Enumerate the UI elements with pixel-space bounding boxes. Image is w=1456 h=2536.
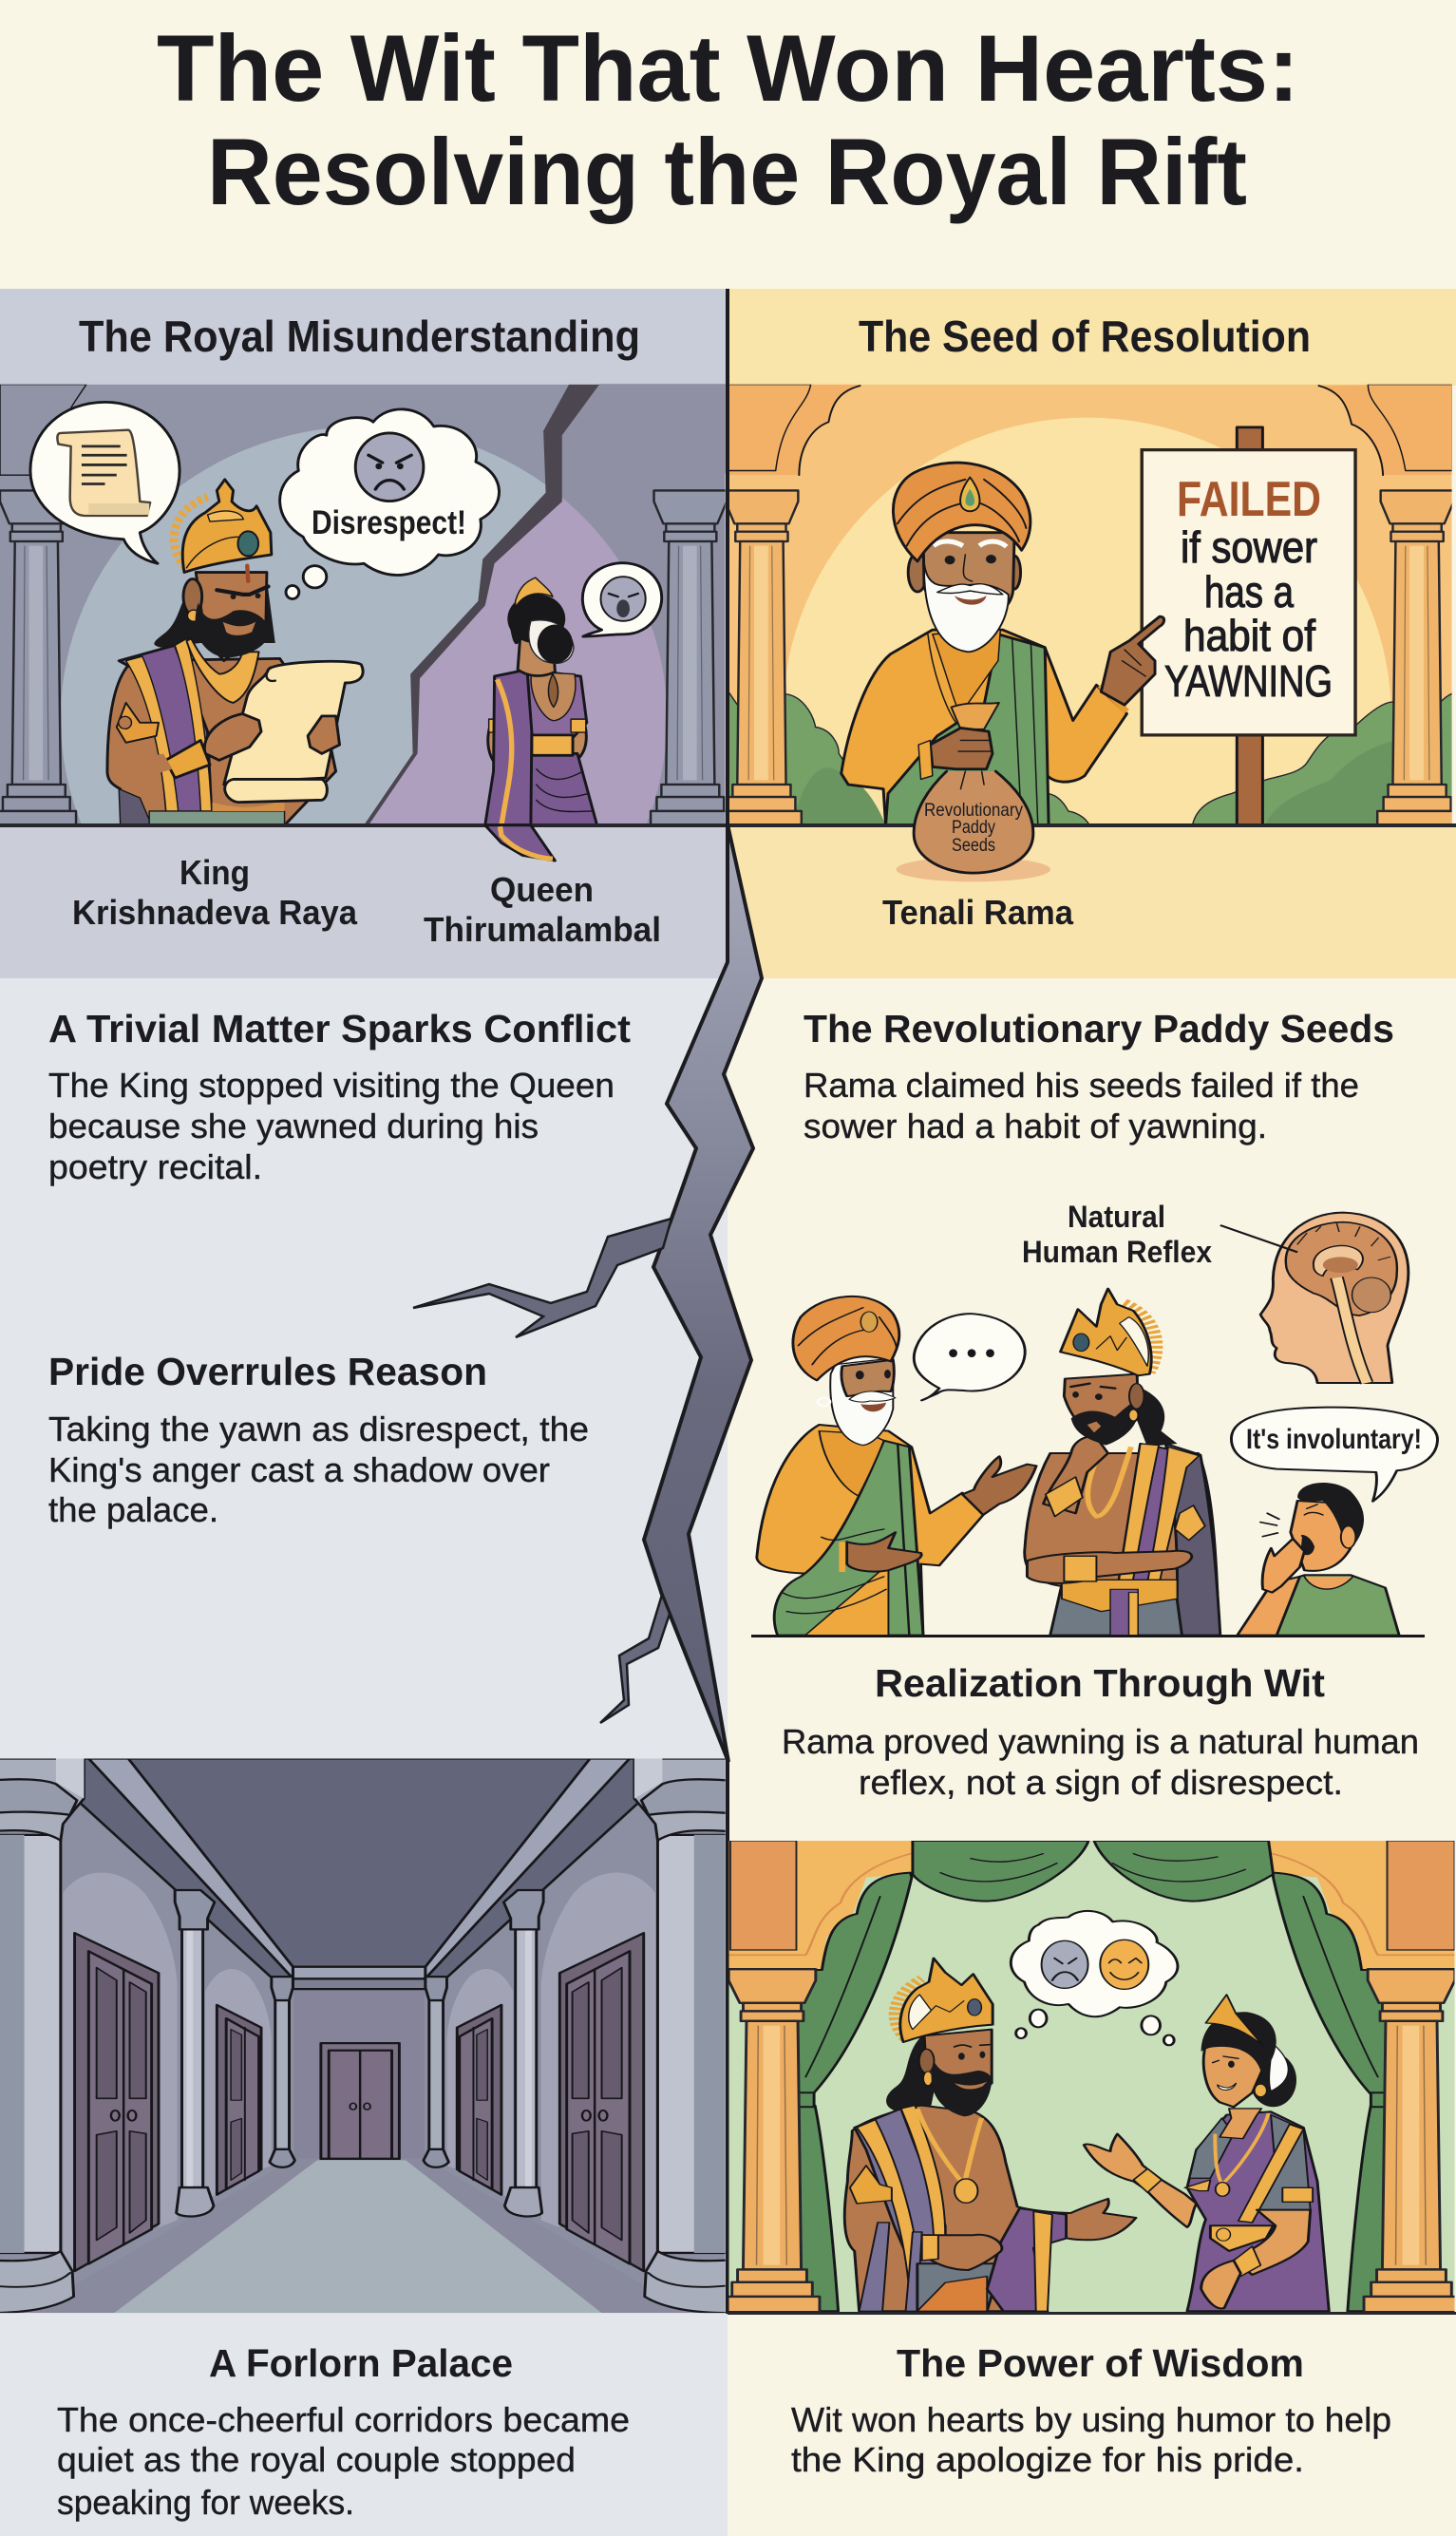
speech bubble: dots xyxy=(914,1314,1025,1400)
illustration: Tenali, king and yawning man xyxy=(751,1200,1438,1637)
crown xyxy=(174,497,208,568)
heading: A Trivial Matter Sparks Conflict: A Trivial Matter Sparks Conflict xyxy=(48,1007,631,1050)
bushes xyxy=(728,691,1456,825)
ground line xyxy=(751,1635,1425,1637)
seed sack: Paddy xyxy=(952,818,995,838)
heading: Realization Through Wit: Realization Through Wit xyxy=(875,1661,1325,1705)
illustration: reconciliation under the arch xyxy=(725,1841,1456,2312)
tenali xyxy=(841,630,1126,825)
panel: left column background xyxy=(0,289,728,2536)
middle column xyxy=(182,1927,203,2187)
text block: seeds: sower had a habit of yawning. xyxy=(804,1107,1267,1145)
panel: right column background xyxy=(728,289,1456,2536)
text block: realization: Rama proved yawning is a natural human xyxy=(782,1722,1419,1761)
text block: realization xyxy=(782,1722,1419,1802)
text block: pride: King's anger cast a shadow over xyxy=(48,1450,550,1489)
text block: conflict: because she yawned during his xyxy=(48,1107,539,1145)
character: Tenali Rama xyxy=(757,1296,1036,1636)
heading: Pride Overrules Reason: Pride Overrules Reason xyxy=(48,1350,487,1393)
text: Disrespect!: Disrespect! xyxy=(312,504,466,541)
label: Natural Human Reflex xyxy=(1022,1200,1212,1269)
speech bubble: yawning queen xyxy=(582,563,662,636)
lintel xyxy=(293,1967,425,1978)
columns xyxy=(725,1969,820,2312)
thought bubble xyxy=(1011,1911,1178,2045)
seed sack: Revolutionary xyxy=(924,801,1023,821)
sign text: FAILED xyxy=(1177,472,1321,527)
illustration frame line xyxy=(0,823,1456,827)
hands xyxy=(204,714,261,760)
text block: seeds xyxy=(804,1066,1359,1145)
back wall xyxy=(293,1988,425,2159)
heading: A Forlorn Palace: A Forlorn Palace xyxy=(209,2341,513,2385)
heading: The Seed of Resolution: The Seed of Resolution xyxy=(859,312,1311,361)
title xyxy=(157,15,1299,224)
sign text: YAWNING xyxy=(1164,656,1333,706)
title: Resolving the Royal Rift xyxy=(207,119,1247,224)
carpet xyxy=(114,2160,602,2313)
sign text: habit of xyxy=(1183,611,1315,660)
illustration: forlorn palace corridor xyxy=(0,1758,728,2313)
text block: wisdom xyxy=(791,2400,1391,2479)
crack branch lower xyxy=(600,1595,670,1723)
text block: forlorn palace: quiet as the royal couple stopped xyxy=(57,2440,576,2479)
text block: pride xyxy=(48,1410,589,1529)
turban xyxy=(893,463,1031,561)
caption: King Krishnadeva Raya: King xyxy=(180,853,250,892)
crack dividing the panels xyxy=(413,289,762,1762)
center door xyxy=(321,2043,399,2159)
ceiling xyxy=(128,1758,590,1967)
character: thoughtful king xyxy=(1025,1289,1220,1636)
left wall and doors xyxy=(0,1758,294,2313)
caption: Queen Thirumalambal: Thirumalambal xyxy=(424,910,661,949)
heading: The Power of Wisdom: The Power of Wisdom xyxy=(897,2341,1304,2385)
text block: forlorn palace: The once-cheerful corridors became xyxy=(57,2400,630,2439)
character: king xyxy=(844,1959,1136,2311)
speech bubble: scroll xyxy=(30,402,180,563)
queen xyxy=(484,577,598,823)
text block: realization: reflex, not a sign of disrespect. xyxy=(859,1763,1343,1802)
crack branch upper xyxy=(413,1219,671,1337)
text block: seeds: Rama claimed his seeds failed if the xyxy=(804,1066,1359,1105)
text block: pride: Taking the yawn as disrespect, the xyxy=(48,1410,589,1448)
label: Natural Human Reflex: Natural xyxy=(1068,1200,1165,1234)
caption: King Krishnadeva Raya: Krishnadeva Raya xyxy=(72,893,358,932)
queen sari overlap xyxy=(485,825,555,861)
crack main body xyxy=(644,824,762,1762)
character: queen xyxy=(1084,1995,1329,2311)
illustration: Tenali Rama with sign xyxy=(729,384,1452,823)
text block: conflict: poetry recital. xyxy=(48,1147,262,1186)
text block: conflict xyxy=(48,1066,615,1186)
center divider lower xyxy=(726,1757,729,2314)
text block: pride: the palace. xyxy=(48,1490,218,1529)
text block: forlorn palace xyxy=(57,2400,630,2522)
speech bubble: It's involuntary xyxy=(1231,1408,1438,1502)
king xyxy=(107,480,363,825)
arch corners xyxy=(728,1841,922,1970)
illustration bottom line xyxy=(728,2312,1456,2315)
label: Natural Human Reflex: Human Reflex xyxy=(1022,1235,1212,1269)
heading: The Royal Misunderstanding: The Royal Misunderstanding xyxy=(79,312,640,361)
sign text xyxy=(1164,472,1333,706)
sign post and board xyxy=(1237,427,1262,825)
caption: Tenali Rama: Tenali Rama xyxy=(882,893,1074,932)
caption: Queen Thirumalambal xyxy=(424,870,661,949)
sign text: has a xyxy=(1204,567,1294,616)
heading: The Revolutionary Paddy Seeds: The Revolutionary Paddy Seeds xyxy=(804,1007,1394,1050)
icon: head with brain xyxy=(1220,1213,1409,1383)
curtains xyxy=(796,1841,1388,2311)
title: The Wit That Won Hearts: xyxy=(157,15,1299,121)
sign text: if sower xyxy=(1181,522,1317,572)
foreground column xyxy=(0,1835,61,2253)
seed sack xyxy=(896,771,1050,881)
thought bubble: angry face xyxy=(280,409,500,599)
scroll xyxy=(224,661,363,785)
text block: forlorn palace: speaking for weeks. xyxy=(57,2483,354,2522)
seed sack: Seeds xyxy=(952,836,995,856)
small column xyxy=(275,2000,289,2149)
text block: wisdom: Wit won hearts by using humor to help xyxy=(791,2400,1391,2439)
illustration: king and queen divided by a crack xyxy=(0,384,726,823)
text block: wisdom: the King apologize for his pride. xyxy=(791,2440,1304,2479)
floor xyxy=(0,2158,726,2313)
head xyxy=(906,557,923,593)
character: yawning man xyxy=(1238,1483,1399,1636)
caption: King Krishnadeva Raya xyxy=(72,853,358,932)
caption: Queen Thirumalambal: Queen xyxy=(490,870,594,909)
text block: conflict: The King stopped visiting the Queen xyxy=(48,1066,615,1105)
speech text: It's involuntary! xyxy=(1246,1424,1422,1455)
